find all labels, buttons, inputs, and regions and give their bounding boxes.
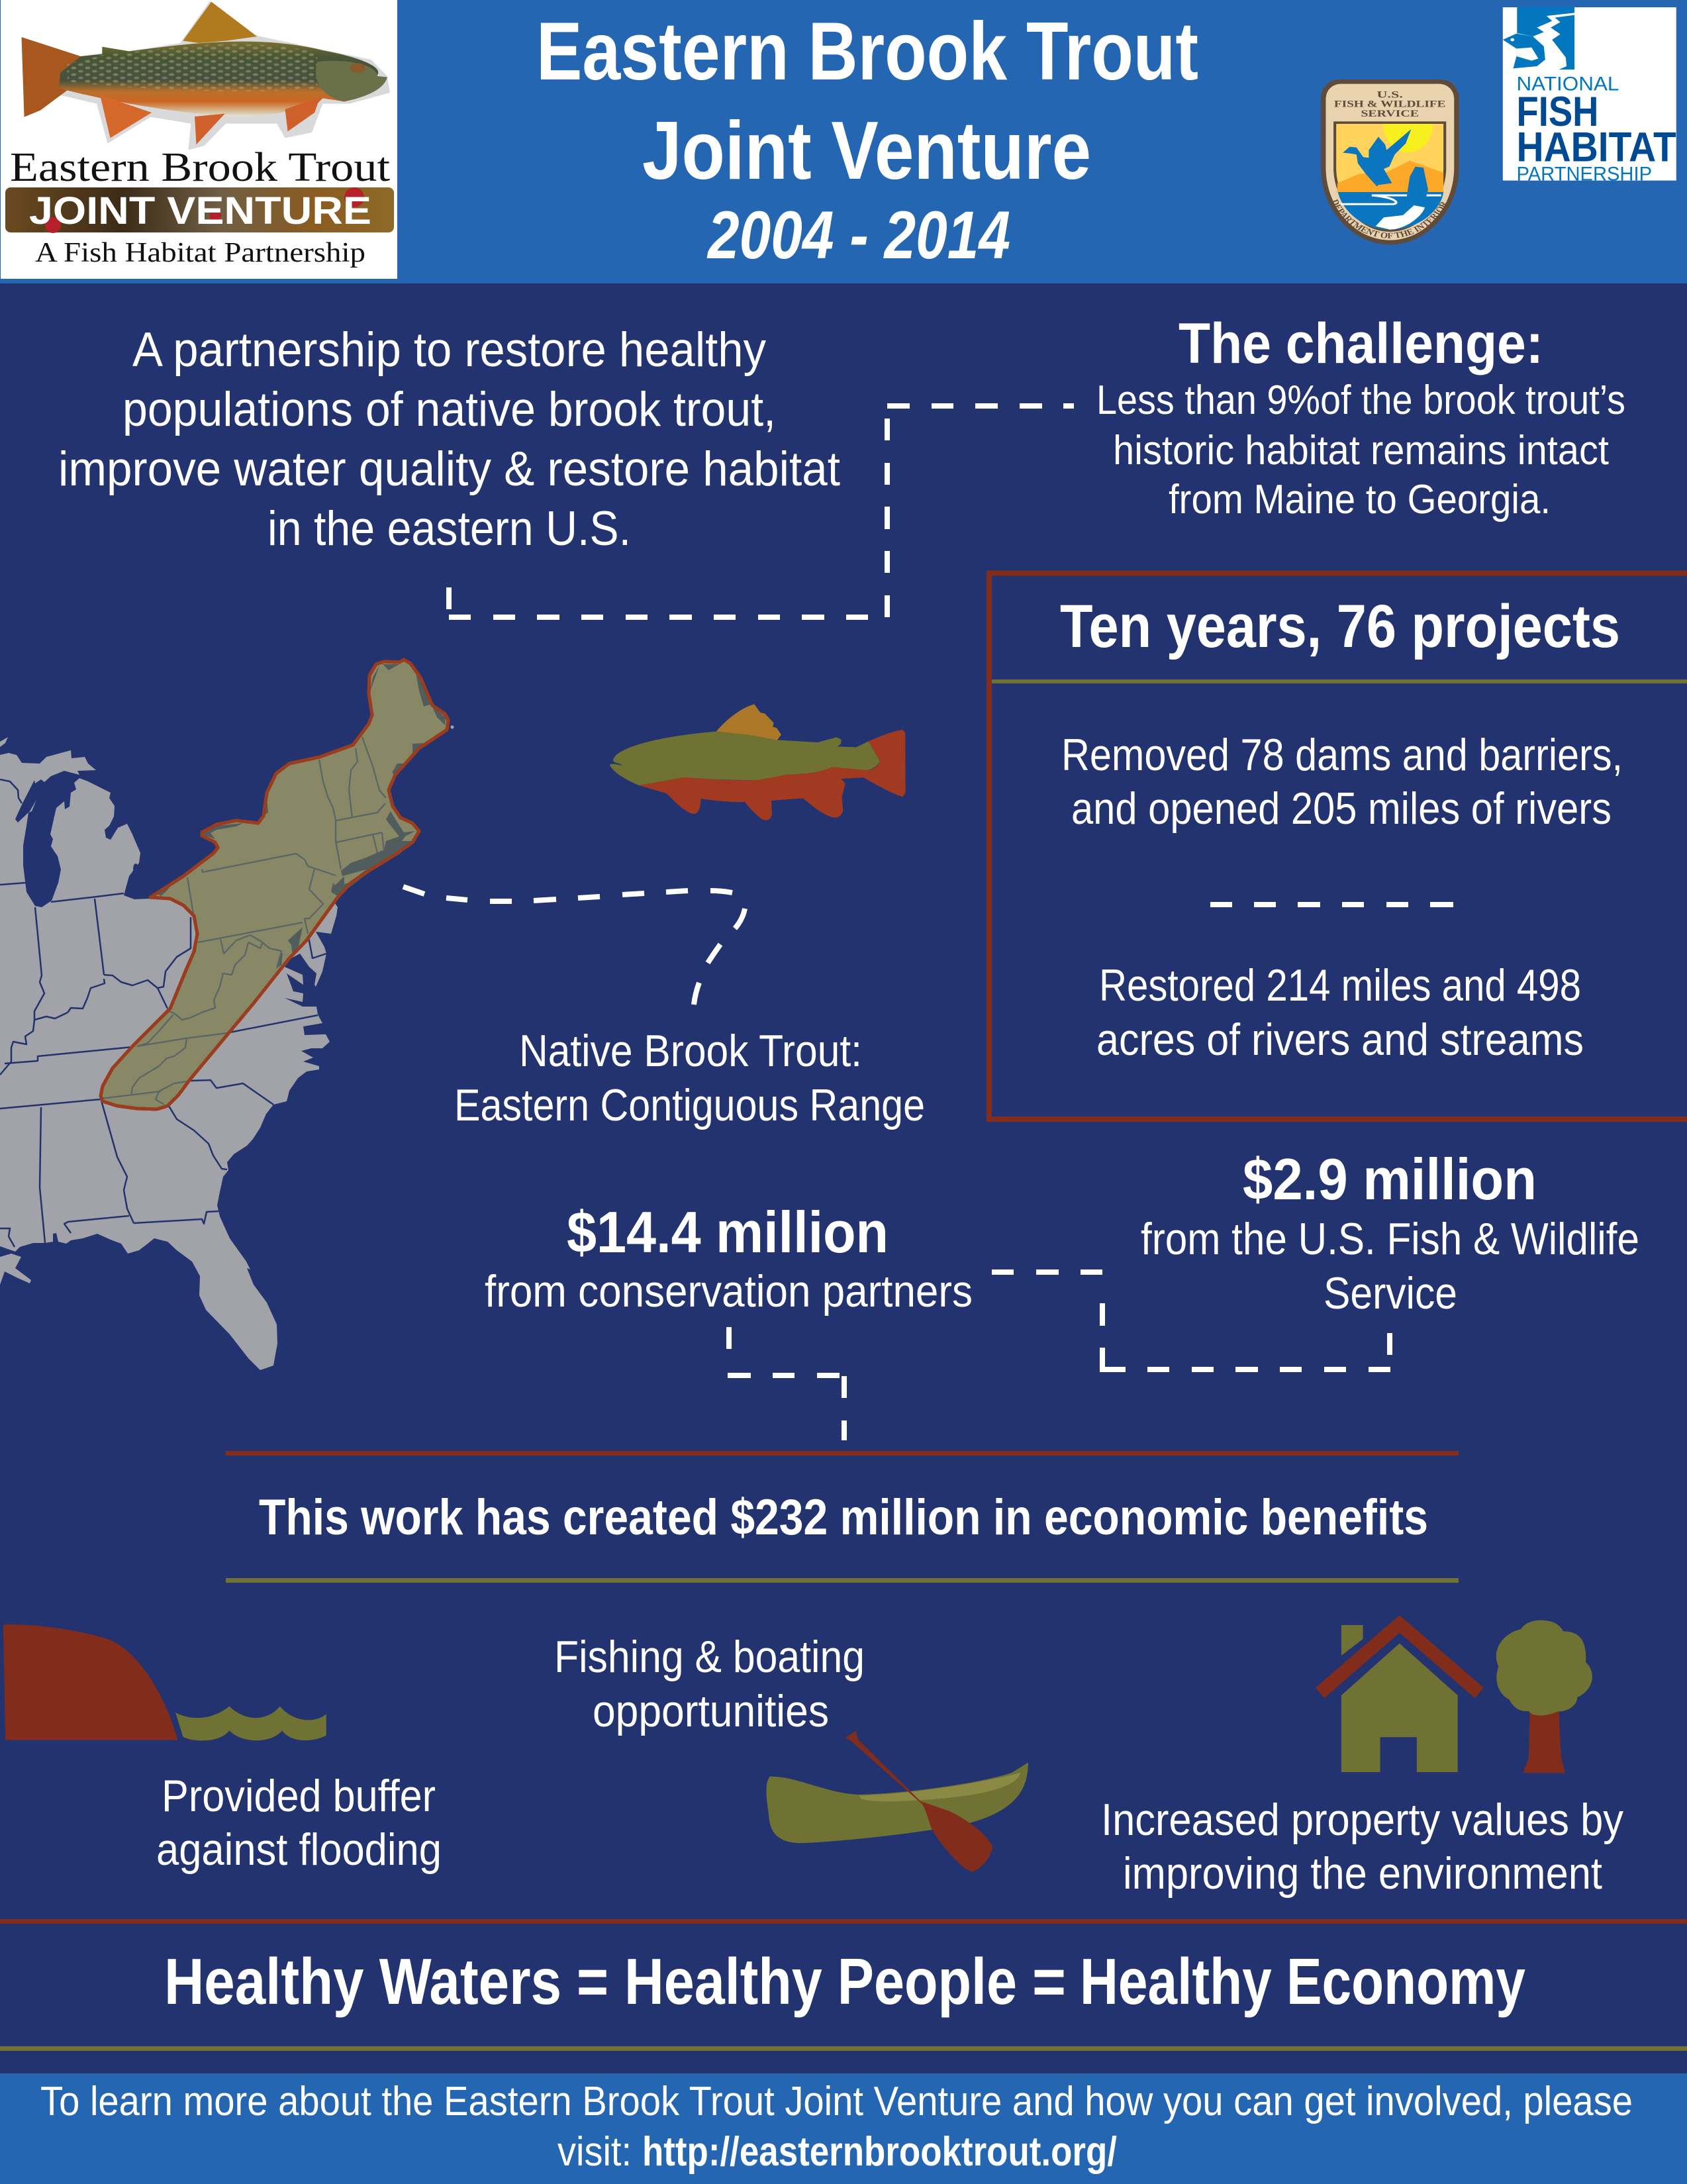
dams text [1061, 730, 1623, 834]
coastal shading [158, 664, 446, 969]
mission statement: improve water quality & restore habitat [58, 442, 840, 496]
flood text: Provided buffer [162, 1771, 436, 1821]
logo banner [5, 187, 394, 232]
stat: partner funding: $14.4 million [567, 1199, 889, 1265]
states landmass [0, 726, 454, 1370]
logo: National Fish Habitat Partnership [1503, 7, 1676, 185]
range label [454, 1026, 925, 1130]
closing slogan: Healthy Economy [1080, 1945, 1525, 2018]
stat: USFWS funding [1141, 1146, 1639, 1318]
logo: U.S. Fish and Wildlife Service shield [1321, 79, 1459, 245]
footer [0, 2073, 1687, 2184]
brook trout range [101, 660, 448, 1109]
logo: U.S. Fish and Wildlife Service shield: DEPARTMENT OF THE INTERIOR [1333, 199, 1446, 238]
closing slogan: = [1032, 1945, 1066, 2018]
footer: visit: [557, 2129, 632, 2175]
mission statement [58, 323, 840, 556]
fishing text: Fishing & boating [554, 1632, 865, 1682]
mission statement: populations of native brook trout, [122, 383, 776, 436]
arrow: dashed connector from mission to challenge [449, 406, 1074, 617]
property text: Increased property values by [1101, 1795, 1623, 1845]
icon: house and tree [1316, 1615, 1592, 1773]
dams text: Removed 78 dams and barriers, [1061, 730, 1623, 780]
range label: Native Brook Trout: [519, 1026, 862, 1076]
icon: trout silhouette [610, 704, 906, 820]
title years: 2004 - 2014 [706, 197, 1010, 273]
logo fish illustration [13, 1, 390, 150]
panel heading: Ten years, 76 projects [1060, 593, 1620, 660]
state borders [0, 779, 326, 1247]
header band [0, 0, 1687, 283]
logo: U.S. Fish and Wildlife Service shield: SERVICE [1361, 108, 1419, 119]
stat: partner funding: from conservation partners [485, 1266, 973, 1316]
range outline over shading [101, 660, 448, 1109]
challenge text [1096, 312, 1625, 522]
logo wordmark: Eastern Brook Trout [10, 145, 390, 190]
stat: partner funding [485, 1199, 973, 1316]
restored text: acres of rivers and streams [1096, 1015, 1584, 1065]
icon: canoe and paddle [766, 1731, 1028, 1872]
logo: U.S. Fish and Wildlife Service shield: U.S. [1377, 89, 1403, 100]
logo: National Fish Habitat Partnership: PARTNERSHIP [1516, 163, 1652, 185]
arrow: dashed connector from map to range label [403, 887, 745, 1005]
property text [1101, 1795, 1623, 1899]
economic benefits banner [226, 1451, 1459, 1583]
closing slogan: Healthy Waters [164, 1945, 561, 2018]
flood text [156, 1771, 442, 1875]
challenge text: historic habitat remains intact [1113, 428, 1609, 473]
logo: National Fish Habitat Partnership: NATIONAL [1516, 73, 1619, 95]
panel: ten years, 76 projects [989, 573, 1687, 1119]
map: eastern United States with brook trout range [0, 660, 454, 1370]
challenge text: from Maine to Georgia. [1169, 477, 1551, 522]
challenge text: Less than 9%of the brook trout’s [1096, 377, 1625, 423]
footer: http://easternbrooktrout.org/ [642, 2129, 1117, 2175]
mission statement: in the eastern U.S. [267, 502, 631, 556]
stat: USFWS funding: $2.9 million [1243, 1146, 1537, 1212]
closing slogan: = [577, 1945, 608, 2018]
stat: USFWS funding: Service [1324, 1268, 1457, 1318]
logo banner spots [45, 187, 364, 233]
mission statement: A partnership to restore healthy [132, 323, 766, 377]
challenge text: The challenge: [1179, 312, 1543, 375]
logo: National Fish Habitat Partnership: FISH [1516, 88, 1598, 135]
lake St. Clair [133, 864, 138, 874]
range state borders [101, 737, 386, 1105]
economic benefits banner: This work has created $232 million in economic benefits [259, 1489, 1428, 1546]
restored text [1096, 960, 1584, 1065]
fishing text [554, 1632, 865, 1736]
arrow: dashed connectors from funding to benefits [728, 1272, 1390, 1440]
closing slogan [0, 1919, 1687, 2051]
logo banner text: JOINT VENTURE [29, 189, 371, 232]
closing slogan: Healthy People [624, 1945, 1017, 2018]
restored text: Restored 214 miles and 498 [1099, 960, 1581, 1011]
flood text: against flooding [156, 1824, 442, 1875]
logo: U.S. Fish and Wildlife Service shield: FISH & WILDLIFE [1334, 98, 1445, 109]
icon: flood buffer hill and water [3, 1624, 326, 1741]
dams text: and opened 205 miles of rivers [1071, 783, 1612, 834]
stat: USFWS funding: from the U.S. Fish & Wildlife [1141, 1214, 1639, 1264]
title line 2: Joint Venture [642, 105, 1091, 197]
fishing text: opportunities [593, 1686, 829, 1736]
range label: Eastern Contiguous Range [454, 1080, 925, 1130]
property text: improving the environment [1123, 1848, 1602, 1899]
logo: Eastern Brook Trout Joint Venture [1, 0, 397, 279]
logo tagline: A Fish Habitat Partnership [35, 238, 365, 268]
title line 1: Eastern Brook Trout [536, 6, 1198, 97]
